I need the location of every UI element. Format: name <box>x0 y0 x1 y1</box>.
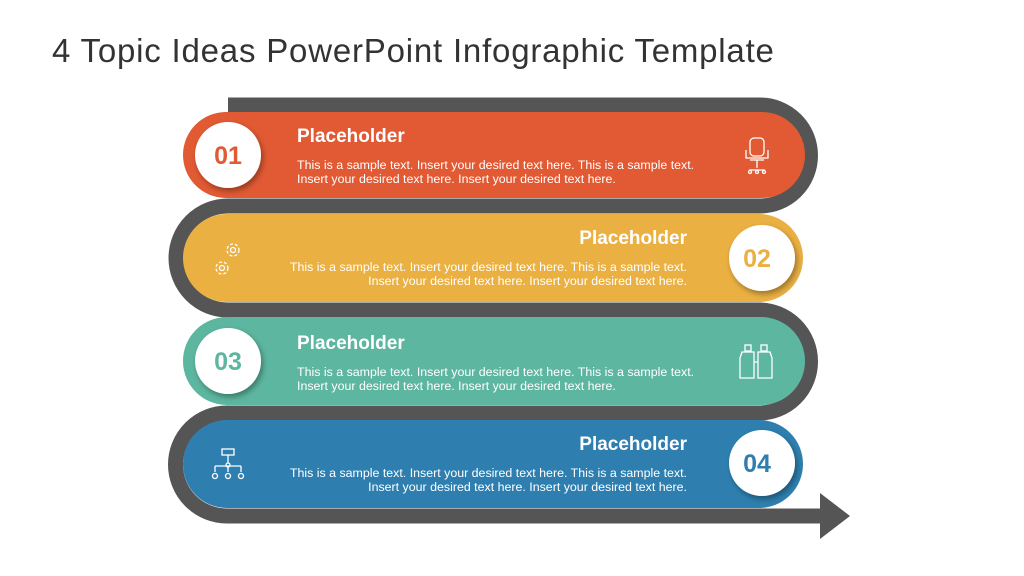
text block 2: Insert your desired text here. Insert your desired text here. <box>368 274 687 288</box>
text block 2 <box>290 228 687 288</box>
text block 1: This is a sample text. Insert your desired text here. This is a sample text. <box>297 158 694 172</box>
panel: teal bar <box>183 317 805 405</box>
text block 2: This is a sample text. Insert your desired text here. This is a sample text. <box>290 260 687 274</box>
badge 03: 03 <box>214 348 242 376</box>
text block 4 <box>290 434 687 494</box>
icon: hierarchy <box>212 449 244 478</box>
badge 01: 01 <box>214 142 242 170</box>
text block 4: Insert your desired text here. Insert your desired text here. <box>368 480 687 494</box>
badge 01 <box>195 122 261 188</box>
text block 3 <box>297 333 694 393</box>
panel: yellow bar <box>183 214 803 302</box>
text block 1: Insert your desired text here. Insert your desired text here. <box>297 172 616 186</box>
badge 02: 02 <box>743 245 771 273</box>
icon: gears <box>216 244 239 274</box>
panel: blue bar <box>183 420 803 508</box>
text block 1 <box>297 126 694 186</box>
icon: binoculars <box>740 345 772 378</box>
panel: orange bar <box>183 112 805 198</box>
text block 4: This is a sample text. Insert your desired text here. This is a sample text. <box>290 466 687 480</box>
badge 03 <box>195 328 261 394</box>
icon: chair <box>746 138 768 174</box>
text block 3: Placeholder <box>297 333 405 354</box>
text block 4: Placeholder <box>579 434 687 455</box>
text block 3: This is a sample text. Insert your desired text here. This is a sample text. <box>297 365 694 379</box>
arrow: gray path <box>175 105 850 539</box>
text block 2: Placeholder <box>579 228 687 249</box>
text block 1: Placeholder <box>297 126 405 147</box>
badge 04 <box>729 430 795 496</box>
title: 4 Topic Ideas PowerPoint Infographic Template <box>52 32 775 69</box>
badge 02 <box>729 225 795 291</box>
text block 3: Insert your desired text here. Insert your desired text here. <box>297 379 616 393</box>
badge 04: 04 <box>743 450 771 478</box>
